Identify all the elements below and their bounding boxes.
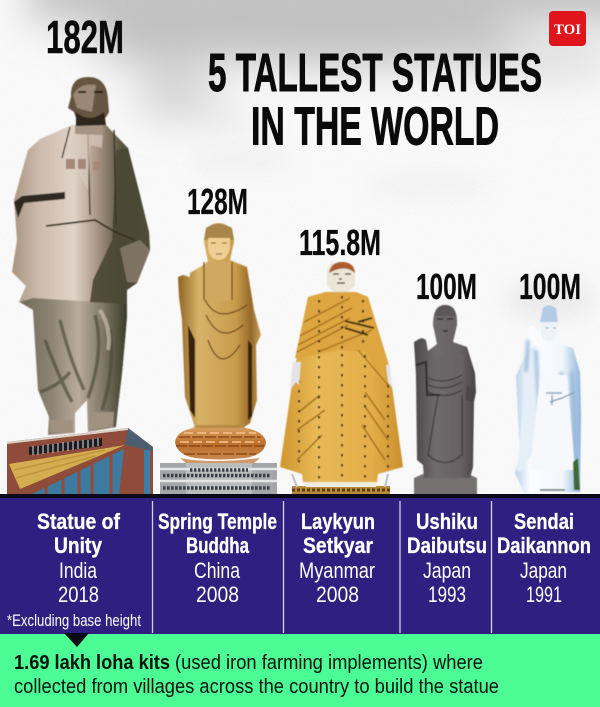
detail: Spring Temple Buddha: Spring Temple xyxy=(158,509,277,534)
TOI logo xyxy=(549,11,586,46)
detail: Sendai Daikannon: Japan xyxy=(520,558,567,583)
detail: Sendai Daikannon: Sendai xyxy=(514,509,574,534)
callout: loha kits fact xyxy=(0,633,600,707)
callout: loha kits fact: (used iron farming implements) where xyxy=(175,651,483,674)
detail: Statue of Unity: 2018 xyxy=(58,582,99,607)
height label: 128M: 128M xyxy=(187,181,248,222)
detail: Laykyun Setkyar: Setkyar xyxy=(303,533,373,558)
figure xyxy=(12,77,150,435)
detail: Ushiku Daibutsu xyxy=(407,509,487,607)
detail: Sendai Daikannon xyxy=(497,509,591,607)
callout: loha kits fact: collected from villages across the country to build the statue xyxy=(14,675,499,698)
callout: loha kits fact: 1.69 lakh loha kits xyxy=(14,651,170,674)
arrow: pointer to Statue of Unity xyxy=(64,633,89,647)
detail: Laykyun Setkyar: Myanmar xyxy=(299,558,375,583)
detail: Laykyun Setkyar: 2008 xyxy=(316,582,359,607)
height label: Ushiku 100M: 100M xyxy=(416,266,477,307)
height label: 182M: 182M xyxy=(46,11,124,63)
detail: Statue of Unity xyxy=(7,509,141,630)
detail: Ushiku Daibutsu: 1993 xyxy=(428,582,466,607)
detail: Spring Temple Buddha: China xyxy=(194,558,241,583)
detail: Ushiku Daibutsu: Japan xyxy=(423,558,471,583)
detail: Statue of Unity: Statue of xyxy=(37,509,121,534)
figure xyxy=(280,262,403,482)
lotus pedestal xyxy=(175,426,266,463)
detail: Ushiku Daibutsu: Daibutsu xyxy=(407,533,487,558)
background: cloudy sky xyxy=(0,0,600,497)
detail: Sendai Daikannon: 1991 xyxy=(526,582,562,607)
temple building xyxy=(160,461,277,495)
statue 2: Spring Temple Buddha xyxy=(160,223,277,495)
statue 4: Ushiku Daibutsu xyxy=(414,305,477,495)
TOI logo: TOI xyxy=(554,22,581,38)
detail: Spring Temple Buddha: 2008 xyxy=(196,582,239,607)
statue 5: Sendai Daikannon xyxy=(515,306,581,493)
height label: 115.8M: 115.8M xyxy=(299,222,381,263)
detail: Spring Temple Buddha xyxy=(158,509,277,607)
pedestal xyxy=(292,474,390,495)
detail: Spring Temple Buddha: Buddha xyxy=(186,533,250,558)
detail: Laykyun Setkyar: Laykyun xyxy=(301,509,375,534)
figure xyxy=(178,223,261,428)
detail: Statue of Unity: India xyxy=(59,558,98,583)
statue 1: Statue of Unity with base building xyxy=(7,77,153,495)
building base xyxy=(7,428,153,495)
detail: Ushiku Daibutsu: Ushiku xyxy=(416,509,478,534)
detail: Laykyun Setkyar xyxy=(299,509,375,607)
detail: Statue of Unity: Unity xyxy=(54,533,103,558)
detail: Statue of Unity: *Excluding base height xyxy=(7,612,141,630)
panel: statue details xyxy=(0,494,600,634)
statue 3: Laykyun Setkyar xyxy=(280,262,403,495)
title xyxy=(208,44,542,156)
